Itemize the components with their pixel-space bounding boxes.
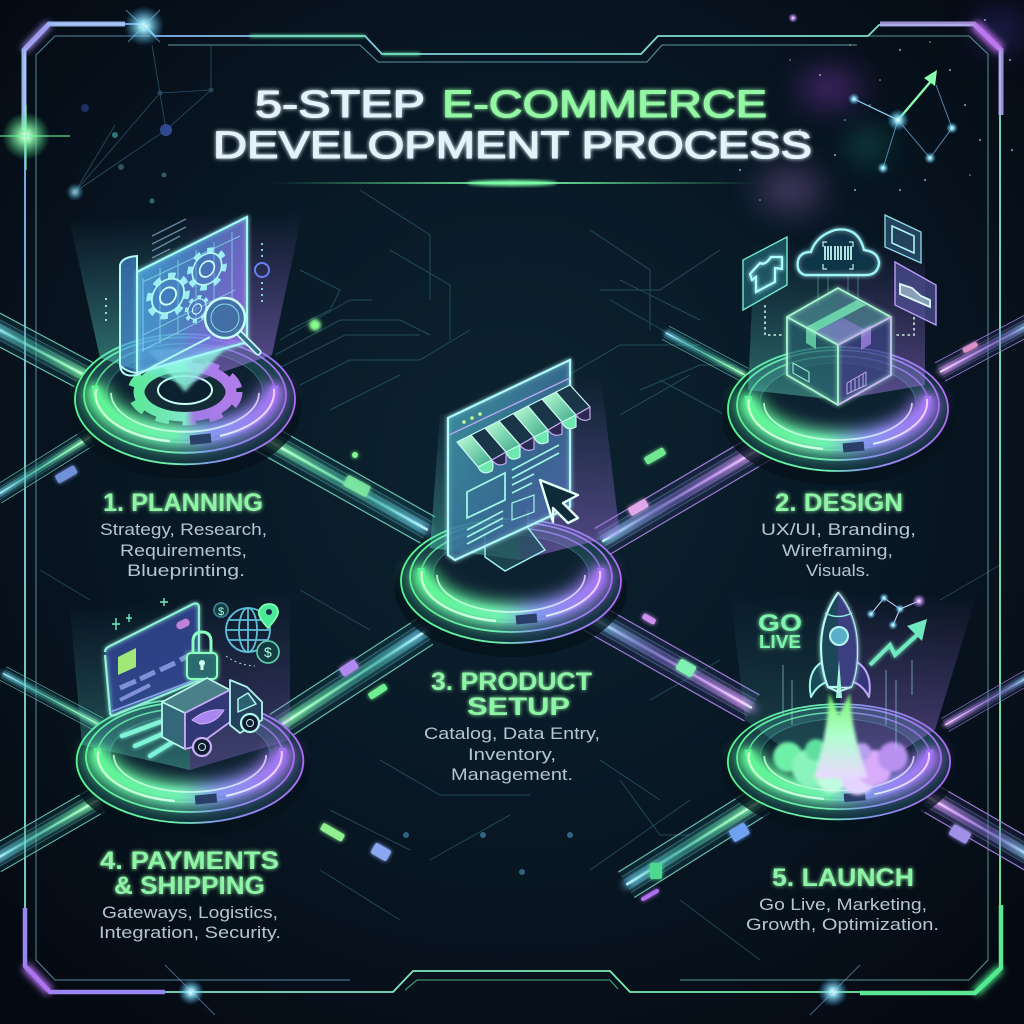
label: step 4 payments and shipping: Integration, Security. (99, 923, 281, 942)
magnifier (205, 298, 258, 352)
rocket (810, 593, 870, 698)
shoe card (895, 262, 936, 325)
t-shirt card (743, 237, 787, 310)
label: step 4 payments and shipping: Gateways, Logistics, (102, 903, 278, 922)
awning (457, 385, 590, 473)
label: step 1 planning: 1. PLANNING (103, 489, 263, 517)
label: step 4 payments and shipping: 4. PAYMENTS (100, 847, 279, 875)
credit card (105, 603, 200, 716)
globe with pin and coins (214, 603, 279, 666)
faint constellation top-left (66, 45, 214, 204)
cloud with barcode (798, 229, 879, 275)
monitor stand (485, 510, 545, 571)
game console card (885, 215, 921, 263)
cursor (540, 480, 578, 523)
globe with pin and coins: $ (264, 644, 272, 660)
icon: blueprint with gears (70, 210, 303, 392)
growth arrow (870, 619, 927, 665)
circuit traces (40, 190, 1000, 960)
icon: online storefront (430, 360, 620, 571)
constellation top-right (739, 13, 1013, 201)
label: step 4 payments and shipping: & SHIPPING (114, 872, 265, 900)
label: step 1 planning (100, 489, 267, 580)
icon: payments and shipping (70, 590, 290, 770)
label: step 5 launch: Go Live, Marketing, (759, 895, 927, 914)
label: step 2 design (761, 489, 916, 580)
label: step 3 product setup: Inventory, (468, 745, 556, 764)
label: step 3 product setup: SETUP (467, 693, 570, 721)
label: step 2 design: UX/UI, Branding, (761, 520, 916, 539)
label: step 1 planning: Blueprinting. (127, 561, 245, 580)
label: step 2 design: Visuals. (806, 561, 870, 580)
icon: box with products (743, 215, 936, 405)
label: step 5 launch: 5. LAUNCH (772, 864, 914, 892)
page layout lines (467, 445, 559, 544)
go live label: LIVE (759, 632, 801, 652)
label: step 2 design: Wireframing, (782, 541, 893, 560)
title: DEVELOPMENT PROCESS (213, 125, 812, 167)
go live label: GO (758, 610, 802, 637)
label: step 4 payments and shipping (99, 847, 281, 942)
go live label (758, 610, 802, 652)
padlock (187, 632, 217, 679)
platform 4 (71, 699, 309, 837)
data chips on beams (54, 320, 978, 902)
star constellation (866, 593, 926, 630)
globe with pin and coins: $ (218, 606, 224, 618)
label: step 1 planning: Strategy, Research, (100, 520, 267, 539)
icon: rocket launch (730, 590, 975, 795)
exhaust flame (814, 693, 868, 778)
title (213, 84, 812, 186)
label: step 3 product setup: 3. PRODUCT (431, 668, 592, 696)
label: step 1 planning: Requirements, (120, 541, 247, 560)
cardboard box (787, 288, 891, 405)
platform 5 (722, 704, 956, 832)
title: E-COMMERCE (442, 84, 767, 126)
label: step 5 launch: Growth, Optimization. (746, 915, 939, 934)
connector beams (0, 311, 1024, 898)
label: step 3 product setup: Management. (451, 765, 573, 784)
label: step 3 product setup (424, 668, 600, 784)
platform 1 (69, 334, 301, 479)
label: step 5 launch (746, 864, 939, 934)
platform gear (134, 365, 236, 419)
platform 2 (722, 347, 954, 485)
smoke clouds (773, 739, 908, 795)
label: step 3 product setup: Catalog, Data Entry, (424, 724, 600, 743)
title: 5-STEP (255, 84, 425, 126)
delivery truck (122, 678, 262, 756)
label: step 2 design: 2. DESIGN (775, 489, 903, 517)
platform 3 (395, 519, 627, 657)
